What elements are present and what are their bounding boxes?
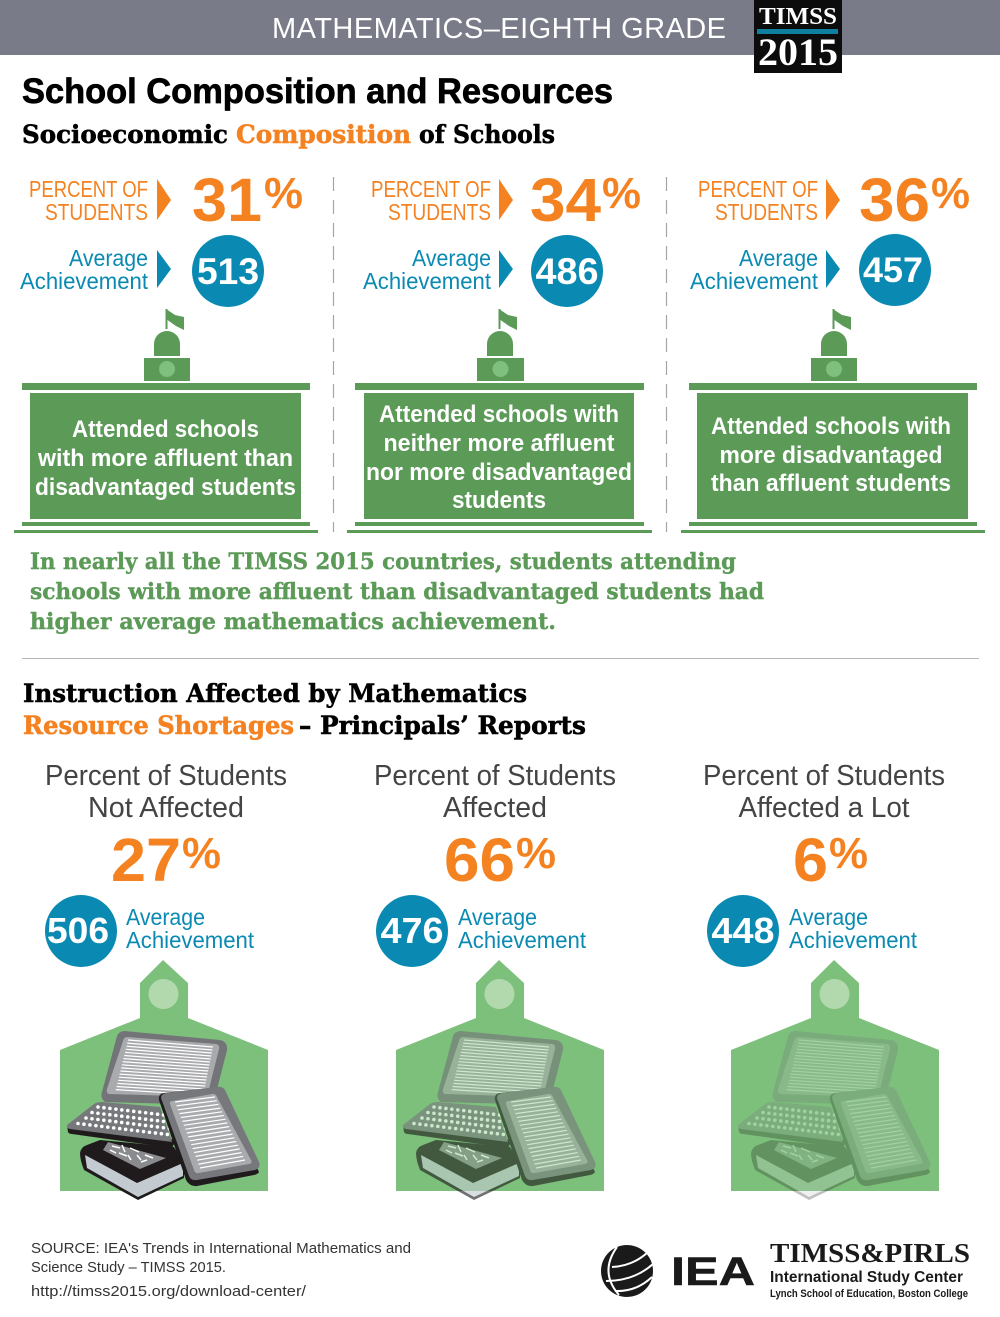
percent of students label	[698, 176, 840, 225]
34 percent: %	[602, 169, 641, 218]
31 percent: %	[264, 169, 303, 218]
percent of students label	[371, 176, 513, 225]
panel: neither more affluent nor disadvantaged	[347, 166, 652, 533]
heading: resource shortages: – Principals’ Reports	[299, 711, 586, 740]
score circle 506	[45, 895, 117, 967]
score circle 448	[707, 895, 779, 967]
average achievement label: Average	[126, 904, 205, 930]
header band: MATHEMATICS–EIGHTH GRADE	[272, 13, 726, 45]
panel: affected	[374, 760, 616, 1200]
school building	[14, 309, 318, 533]
31 percent	[192, 166, 303, 234]
percent of students label: STUDENTS	[715, 199, 818, 225]
panel: affected a lot	[703, 760, 945, 1200]
36 percent	[859, 166, 970, 234]
label: Affected a Lot	[738, 792, 910, 824]
6 percent: %	[829, 829, 868, 878]
school building	[681, 309, 985, 533]
average achievement label: Achievement	[20, 268, 149, 294]
6 percent: 6	[793, 826, 828, 894]
panel: more disadvantaged schools	[681, 166, 985, 533]
panel: more affluent schools	[14, 166, 318, 533]
label: Not Affected	[88, 792, 244, 824]
title: School Composition and Resources	[22, 72, 613, 111]
school building: with more affluent than	[37, 445, 293, 472]
average achievement label: Average	[69, 245, 148, 271]
66 percent: 66	[444, 826, 515, 894]
school building: more disadvantaged	[720, 442, 942, 469]
27 percent: 27	[111, 826, 181, 894]
27 percent	[111, 826, 221, 894]
header band	[0, 0, 1000, 55]
34 percent	[530, 166, 641, 234]
score circle 513	[192, 235, 264, 307]
percent of students label: STUDENTS	[45, 199, 148, 225]
icon: school with devices	[60, 960, 268, 1200]
source note	[31, 1240, 411, 1300]
average achievement label: Achievement	[458, 927, 587, 953]
school building: neither more affluent	[384, 430, 615, 457]
6 percent	[793, 826, 868, 894]
score circle 457: 457	[863, 251, 923, 290]
heading: resource shortages: Instruction Affected by Mathematics	[23, 679, 527, 708]
average achievement label: Average	[789, 904, 868, 930]
average achievement label	[363, 245, 513, 294]
school building: than affluent students	[711, 470, 951, 497]
average achievement label: Average	[458, 904, 537, 930]
36 percent: %	[931, 169, 970, 218]
school building: students	[452, 487, 546, 514]
school building: disadvantaged students	[35, 474, 296, 501]
TIMSS and PIRLS logo text: International Study Center	[770, 1269, 963, 1286]
source note: Science Study – TIMSS 2015.	[31, 1259, 226, 1276]
31 percent: 31	[192, 166, 262, 234]
TIMSS 2015 badge: 2015	[758, 31, 838, 74]
TIMSS and PIRLS logo text	[770, 1238, 970, 1300]
TIMSS 2015 badge: TIMSS	[759, 4, 837, 30]
average achievement label	[789, 904, 918, 953]
school building	[347, 309, 652, 533]
average achievement label: Achievement	[126, 927, 255, 953]
IEA logo: IEA	[671, 1250, 755, 1294]
score circle 513: 513	[197, 251, 259, 292]
label	[45, 760, 287, 824]
subtitle: socioeconomic composition: of Schools	[419, 120, 555, 149]
average achievement label: Achievement	[690, 268, 819, 294]
label	[374, 760, 616, 824]
source note: SOURCE: IEA's Trends in International Mathematics and	[31, 1240, 411, 1257]
average achievement label	[20, 245, 171, 294]
36 percent: 36	[859, 166, 930, 234]
school building: Attended schools with	[711, 413, 951, 440]
average achievement label: Average	[739, 245, 818, 271]
label: Percent of Students	[703, 760, 945, 792]
subtitle: socioeconomic composition	[22, 120, 555, 149]
key finding text: schools with more affluent than disadvantaged students had	[30, 579, 764, 605]
icon: school with very faded devices	[731, 960, 939, 1200]
key finding text	[30, 549, 764, 635]
label	[703, 760, 945, 824]
heading: resource shortages: Resource Shortages	[23, 711, 294, 740]
score circle 486: 486	[536, 251, 598, 292]
label: Percent of Students	[374, 760, 616, 792]
percent of students label: PERCENT OF	[698, 176, 818, 202]
27 percent: %	[182, 829, 221, 878]
score circle 506: 506	[47, 910, 109, 951]
school building: nor more disadvantaged	[366, 459, 632, 486]
percent of students label: STUDENTS	[388, 199, 491, 225]
percent of students label: PERCENT OF	[29, 176, 148, 202]
label: Affected	[443, 792, 547, 824]
TIMSS and PIRLS logo text: TIMSS&PIRLS	[770, 1238, 970, 1268]
score circle 448: 448	[712, 910, 774, 951]
percent of students label: PERCENT OF	[371, 176, 491, 202]
average achievement label	[690, 245, 840, 294]
score circle 476	[376, 895, 448, 967]
score circle 457	[859, 234, 931, 306]
school building: Attended schools with	[379, 401, 619, 428]
average achievement label	[126, 904, 255, 953]
key finding text: higher average mathematics achievement.	[30, 609, 556, 635]
average achievement label: Average	[412, 245, 491, 271]
score circle 476: 476	[380, 910, 444, 951]
panel: not affected	[45, 760, 287, 1200]
heading: resource shortages	[23, 679, 586, 740]
source note: http://timss2015.org/download-center/	[31, 1283, 307, 1300]
IEA logo	[601, 1245, 755, 1297]
average achievement label	[458, 904, 587, 953]
label: Percent of Students	[45, 760, 287, 792]
key finding text: In nearly all the TIMSS 2015 countries, students attending	[30, 549, 736, 575]
TIMSS 2015 badge	[754, 0, 842, 74]
TIMSS and PIRLS logo text: Lynch School of Education, Boston College	[770, 1288, 968, 1300]
subtitle: socioeconomic composition: Composition	[236, 120, 411, 149]
34 percent: 34	[530, 166, 601, 234]
66 percent: %	[516, 829, 556, 878]
average achievement label: Achievement	[363, 268, 492, 294]
average achievement label: Achievement	[789, 927, 918, 953]
subtitle: socioeconomic composition: Socioeconomic	[22, 120, 228, 149]
school building: Attended schools	[72, 416, 259, 443]
icon: school with faded devices	[396, 960, 604, 1200]
score circle 486	[531, 235, 603, 307]
66 percent	[444, 826, 556, 894]
percent of students label	[29, 176, 171, 225]
